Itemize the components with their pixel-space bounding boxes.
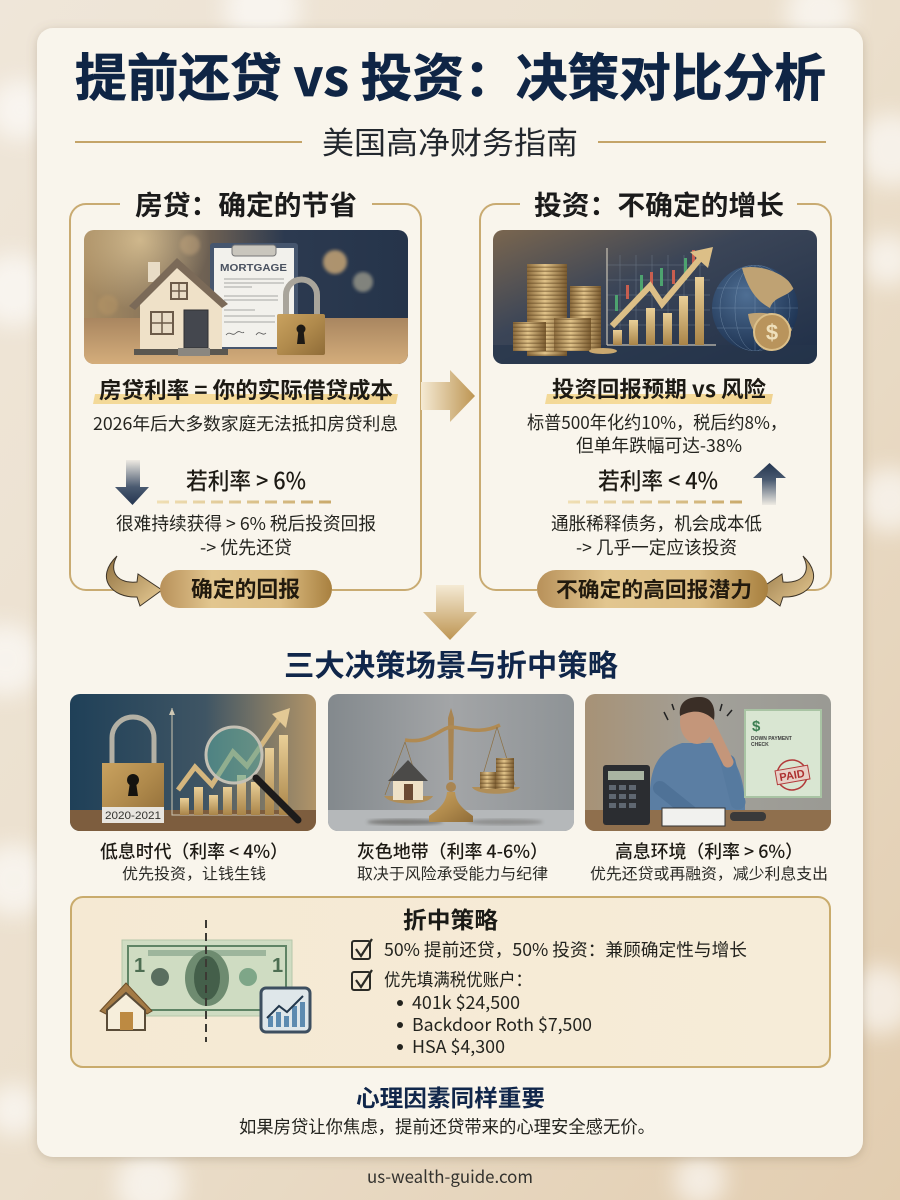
arrow: down connector [423,585,477,640]
image: stressed man with calculator and check: DOWN PAYMENT [751,736,792,742]
panel heading: investing: 投资：不确定的增长 [534,184,784,223]
image: scale with house and coins [328,694,574,831]
text: psychology note: 如果房贷让你焦虑，提前还贷带来的心理安全感无价。 [239,1114,655,1139]
panel: compromise strategy [71,897,830,1067]
icon: down arrow [115,460,149,505]
text: investing conclusion [551,510,762,560]
text: S&P 500 return: 但单年跌幅可达-38% [576,432,742,458]
caption text: high rate: 优先还贷或再融资，减少利息支出 [590,862,828,884]
footer: us-wealth-guide.com [367,1163,533,1188]
text: mortgage conclusion: -> 优先还贷 [200,534,292,560]
subtitle with rules: 美国高净财务指南 [322,118,578,163]
icon: curved arrow left [106,556,162,606]
pill: certain return [160,570,332,608]
icon: split dollar bill with house and chart: 1 [272,955,283,977]
condition: rate above 6%: 若利率 > 6% [186,462,306,496]
pill: uncertain high return: 不确定的高回报潜力 [556,574,752,604]
image: house, mortgage document and padlock: MORTGAGE [220,262,287,274]
item: tax-advantaged accounts: HSA $4,300 [412,1034,505,1059]
arrow: right connector [421,370,475,422]
item: 50/50 split: 50% 提前还贷，50% 投资：兼顾确定性与增长 [384,937,747,962]
text: S&P 500 return: 标普500年化约10%，税后约8%， [527,409,787,435]
caption text: low rate: 优先投资，让钱生钱 [122,862,266,884]
caption: high rate: 高息环境（利率 > 6%） [615,838,803,864]
text: S&P 500 return [527,409,787,458]
section heading: 三大决策场景与折中策略 [284,641,618,685]
item: tax-advantaged accounts: 优先填满税优账户： [384,967,532,992]
pill: uncertain high return [537,570,768,608]
image: coins, chart and globe: $ [766,320,778,345]
panel: mortgage [70,170,421,608]
caption text: grey zone: 取决于风险承受能力与纪律 [357,862,548,884]
image: padlock with magnifier over rising chart: 2020-2021 [105,810,161,822]
image: stressed man with calculator and check [585,694,831,831]
panel: investing [480,184,831,608]
item: tax-advantaged accounts: 401k $24,500 [412,990,520,1015]
text: mortgage conclusion: 很难持续获得 > 6% 税后投资回报 [116,510,376,536]
text: investing conclusion: 通胀稀释债务，机会成本低 [551,510,762,536]
pill: certain return: 确定的回报 [191,572,300,604]
panel heading: mortgage: 房贷：确定的节省 [135,184,357,223]
image: stressed man with calculator and check: $ [752,718,761,735]
icon: split dollar bill with house and chart [100,920,310,1042]
item: tax-advantaged accounts: Backdoor Roth $7,500 [412,1012,592,1037]
icon: up arrow [753,463,786,505]
caption: low rate: 低息时代（利率 < 4%） [100,838,288,864]
item: tax-advantaged accounts [352,967,592,1059]
scenario: grey zone [328,694,574,884]
heading with highlight: return vs risk: 投资回报预期 vs 风险 [552,372,766,404]
title: 提前还贷 vs 投资：决策对比分析 [75,37,826,111]
image: house, mortgage document and padlock [84,230,408,364]
text: deduction note: 2026年后大多数家庭无法抵扣房贷利息 [93,411,398,436]
text: investing conclusion: -> 几乎一定应该投资 [576,534,737,560]
image: coins, chart and globe [493,230,817,364]
image: stressed man with calculator and check: PAID [779,768,806,784]
heading: compromise strategy: 折中策略 [403,901,498,935]
scenario: low rate [70,694,316,884]
image: padlock with magnifier over rising chart [70,694,316,831]
heading with highlight: mortgage rate: 房贷利率 = 你的实际借贷成本 [99,373,393,405]
caption: grey zone: 灰色地带（利率 4-6%） [357,838,548,864]
icon: curved arrow right [758,556,814,606]
icon: split dollar bill with house and chart: 1 [134,955,145,977]
image: stressed man with calculator and check: CHECK [751,742,769,748]
scenario: high rate [585,694,831,884]
text: mortgage conclusion [116,510,376,560]
heading: psychology: 心理因素同样重要 [356,1079,545,1113]
condition: rate below 4%: 若利率 < 4% [598,462,718,496]
